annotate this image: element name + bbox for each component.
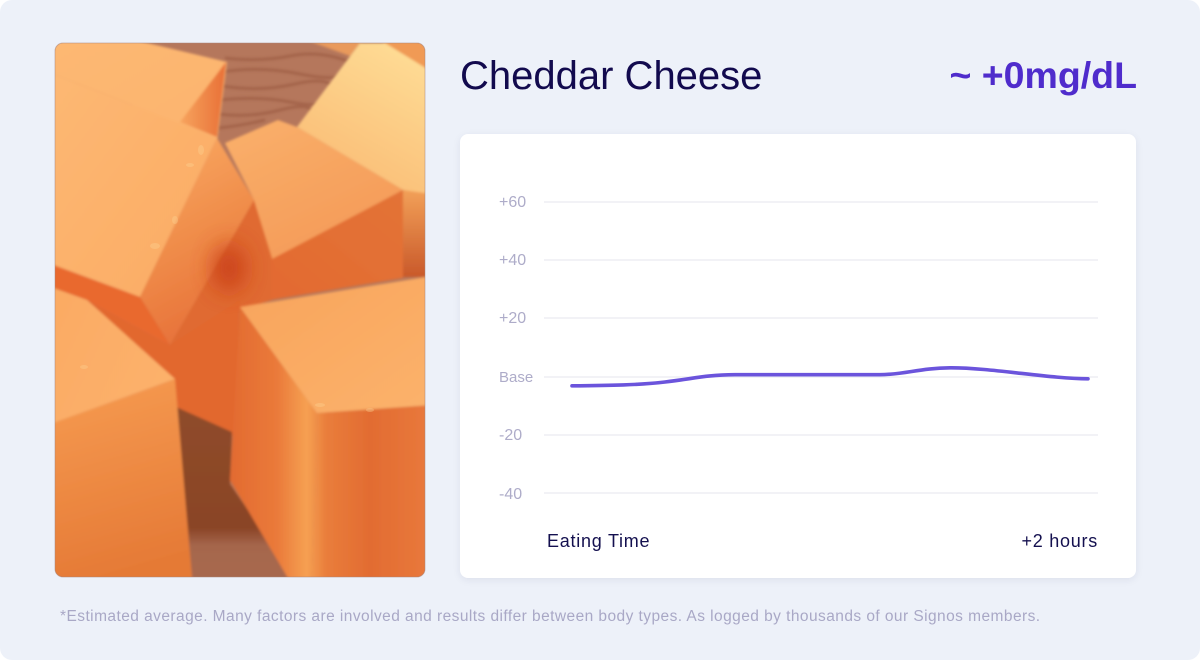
title: Cheddar Cheese bbox=[460, 54, 762, 98]
panel: chart card bbox=[460, 134, 1136, 578]
value: glucose change: ~ +0mg/dL bbox=[949, 54, 1137, 96]
cube: large left bbox=[48, 72, 254, 345]
x label: start: Eating Time bbox=[547, 531, 650, 551]
cube: lower left bbox=[48, 286, 192, 585]
cheese piece lower centre bbox=[87, 300, 240, 436]
y axis labels: +60 bbox=[499, 194, 526, 211]
wood lower gap bbox=[176, 407, 286, 576]
y axis labels: -20 bbox=[499, 427, 522, 444]
cube: top right bbox=[297, 43, 432, 277]
y axis labels: +40 bbox=[499, 252, 526, 269]
shadow glow between cubes bbox=[212, 244, 246, 292]
cube: top left back bbox=[55, 43, 228, 139]
footnote: *Estimated average. Many factors are involved and results differ between body types. As logged by thousands of our Signos members. bbox=[60, 608, 1041, 625]
cheese crumbs bbox=[80, 145, 374, 412]
wood background top bbox=[55, 43, 425, 577]
x label: end: +2 hours bbox=[1021, 531, 1098, 551]
y axis labels: Base bbox=[499, 369, 533, 386]
cube: middle bbox=[170, 120, 403, 345]
photo: cheddar cheese cubes bbox=[54, 42, 426, 578]
y axis labels bbox=[499, 194, 533, 503]
y axis labels: -40 bbox=[499, 486, 522, 503]
cube: lower right bbox=[230, 276, 432, 585]
y axis labels: +20 bbox=[499, 310, 526, 327]
line chart bbox=[499, 194, 1098, 503]
glucose curve bbox=[572, 368, 1088, 386]
top band and right back cube bbox=[312, 43, 425, 69]
